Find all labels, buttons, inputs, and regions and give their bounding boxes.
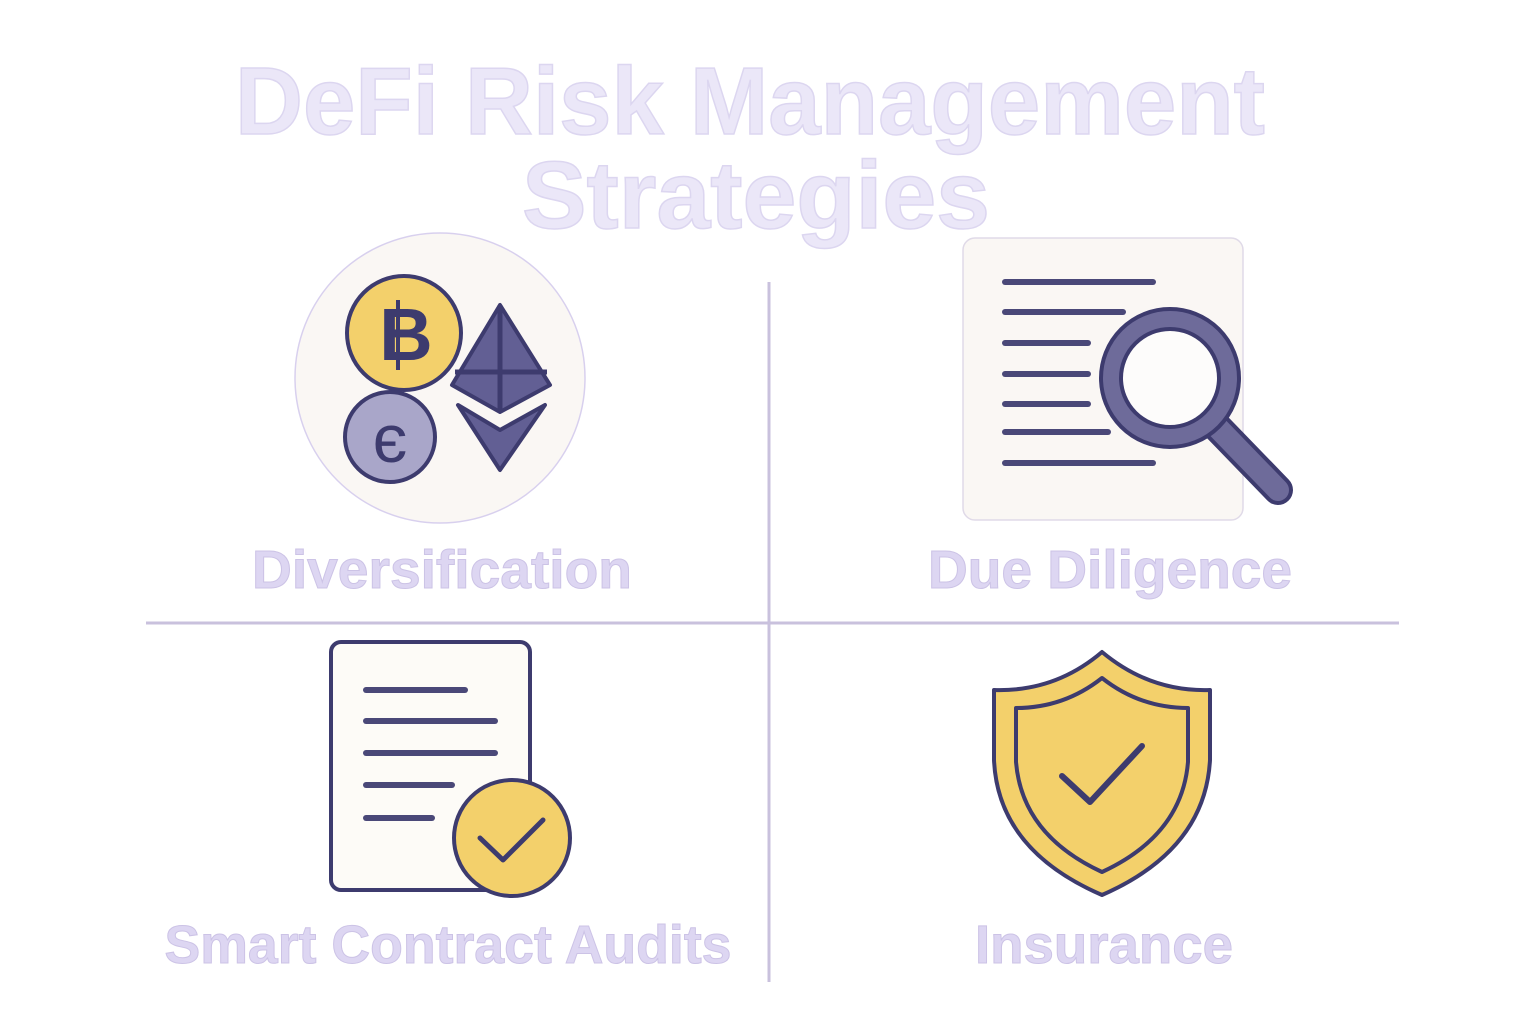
label: due diligence: Due Diligence [928, 540, 1292, 600]
panel: due diligence [928, 238, 1292, 600]
label: insurance: Insurance [975, 915, 1233, 975]
icon: coins: є [373, 401, 407, 477]
panel: insurance [975, 652, 1233, 975]
title: DeFi Risk Management [235, 48, 1265, 155]
icon: coins [295, 233, 585, 523]
icon: shield [994, 652, 1210, 895]
label: diversification: Diversification [252, 540, 632, 600]
icon: document with magnifier [963, 238, 1278, 520]
icon: audited document [331, 642, 570, 896]
title [235, 48, 1265, 249]
grid dividers [146, 282, 1399, 982]
label: smart contract audits: Smart Contract Audits [164, 915, 732, 975]
panel: smart contract audits [164, 642, 732, 975]
title: Strategies [522, 142, 990, 249]
icon: coins: B [379, 293, 433, 376]
panel: diversification [252, 233, 632, 600]
